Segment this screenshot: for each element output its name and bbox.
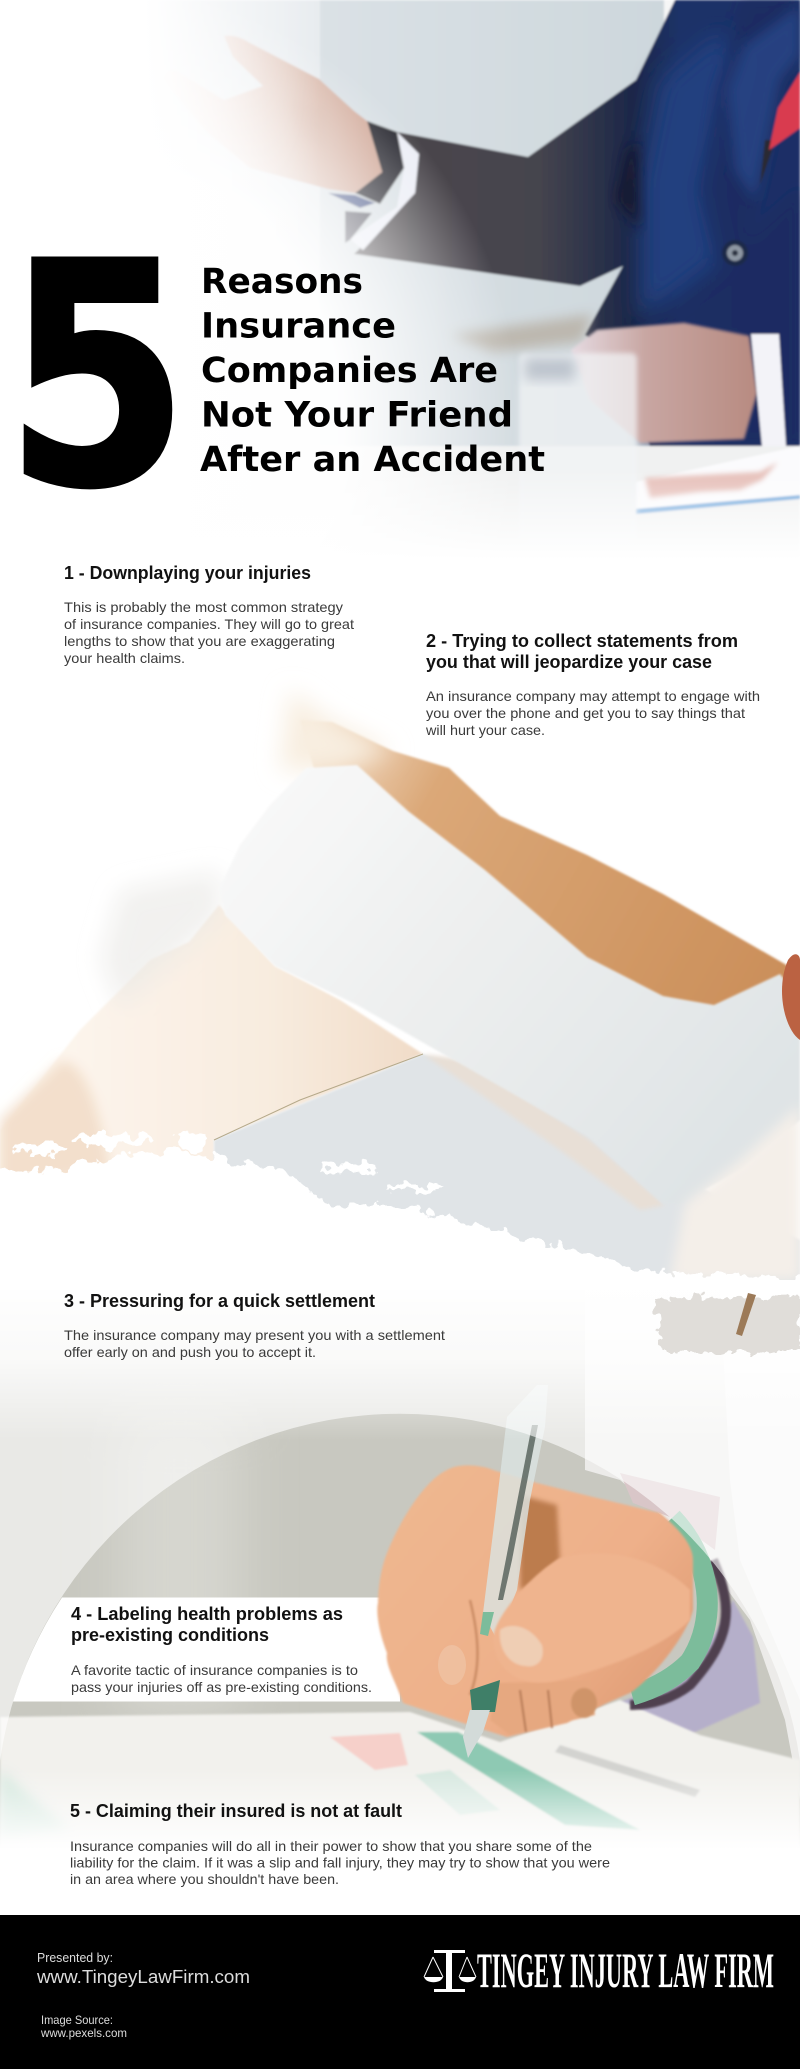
paper and chart (636, 446, 800, 514)
title text (200, 262, 545, 480)
title text: Companies Are (201, 351, 498, 391)
other leg (0, 870, 423, 1190)
item 5 (70, 1801, 610, 1887)
photo: hand writing with pen (0, 1280, 800, 1915)
item 5: Insurance companies will do all in their power to show that you share some of the (70, 1838, 592, 1854)
table band (450, 314, 593, 352)
index fingertip (438, 1645, 466, 1685)
item 1 (64, 563, 354, 666)
sleeve shadow (617, 1600, 760, 1733)
right hand (571, 323, 757, 443)
mattress (214, 1054, 800, 1290)
item 5: 5 - Claiming their insured is not at fault (70, 1801, 402, 1821)
item 3: 3 - Pressuring for a quick settlement (64, 1291, 375, 1311)
pen (463, 1385, 548, 1758)
item 4: pre-existing conditions (71, 1625, 269, 1645)
item 2: 2 - Trying to collect statements from (426, 631, 738, 651)
title text: After an Accident (200, 440, 545, 480)
white text band for item 4 (13, 1598, 400, 1702)
item 4 (71, 1604, 372, 1695)
item 1: of insurance companies. They will go to great (64, 616, 354, 632)
item 3: offer early on and push you to accept it. (64, 1344, 316, 1360)
item 2: you that will jeopardize your case (426, 652, 712, 672)
glass (519, 353, 637, 543)
white coat (585, 1280, 800, 1800)
backdrop (0, 1290, 800, 1860)
paper (0, 1700, 800, 1860)
item 5: in an area where you shouldn't have been. (70, 1871, 339, 1887)
item 3 (64, 1291, 445, 1360)
thumb (493, 1553, 690, 1683)
outside arc wash (0, 1280, 800, 1761)
footer bar (0, 1915, 800, 2069)
torn gray patch (655, 1296, 800, 1352)
photo fade overlays (0, 0, 800, 620)
photo: businessman gesturing (100, 0, 800, 560)
cast (219, 765, 800, 1204)
calf skin (300, 720, 790, 1012)
presented by: Presented by: (37, 1950, 113, 1965)
photo: leg in cast (0, 690, 800, 1340)
left cuff and watch (350, 132, 419, 250)
title text: Insurance (201, 306, 396, 346)
dark cuff edge (630, 1560, 726, 1705)
item 2 (425, 631, 760, 738)
item 1: your health claims. (64, 650, 185, 666)
table (100, 446, 800, 560)
toes and foot (670, 954, 800, 1280)
title text: Reasons (201, 262, 363, 302)
big numeral 5: 5 (5, 197, 189, 556)
top fade (0, 1280, 800, 1440)
gesturing hand (163, 36, 382, 193)
presented by: www.TingeyLawFirm.com (36, 1967, 250, 1987)
jacket (354, 0, 800, 446)
item 1: 1 - Downplaying your injuries (64, 563, 311, 583)
item 1: lengths to show that you are exaggerating (64, 633, 335, 649)
hand (377, 1465, 693, 1737)
item 2: will hurt your case. (425, 722, 545, 738)
item 2: you over the phone and get you to say things that (426, 705, 745, 721)
tie (769, 72, 800, 150)
item 2: An insurance company may attempt to engage with (426, 688, 760, 704)
item 5: liability for the claim. If it was a slip and fall injury, they may try to show that you were (70, 1854, 610, 1870)
button (722, 240, 748, 266)
item 3: The insurance company may present you with a settlement (64, 1327, 445, 1343)
image source: www.pexels.com (40, 2026, 127, 2040)
title text: Not Your Friend (201, 396, 513, 436)
title block (5, 197, 545, 556)
torn brush edge (0, 1150, 800, 1340)
item 4: pass your injuries off as pre-existing conditions. (71, 1679, 372, 1695)
item 4: A favorite tactic of insurance companies is to (71, 1662, 358, 1678)
image source: Image Source: (41, 2013, 113, 2027)
white gap under torn edge (0, 1280, 800, 1288)
bottom fade (0, 1770, 800, 1850)
image source (40, 2013, 127, 2040)
item 1: This is probably the most common strategy (64, 599, 343, 615)
presented by (36, 1950, 250, 1987)
checked cuff (620, 1473, 720, 1550)
icon: scales of justice (424, 1950, 476, 1992)
item 4: 4 - Labeling health problems as (71, 1604, 343, 1624)
logo (424, 1942, 774, 1998)
green cuff (632, 1518, 707, 1695)
